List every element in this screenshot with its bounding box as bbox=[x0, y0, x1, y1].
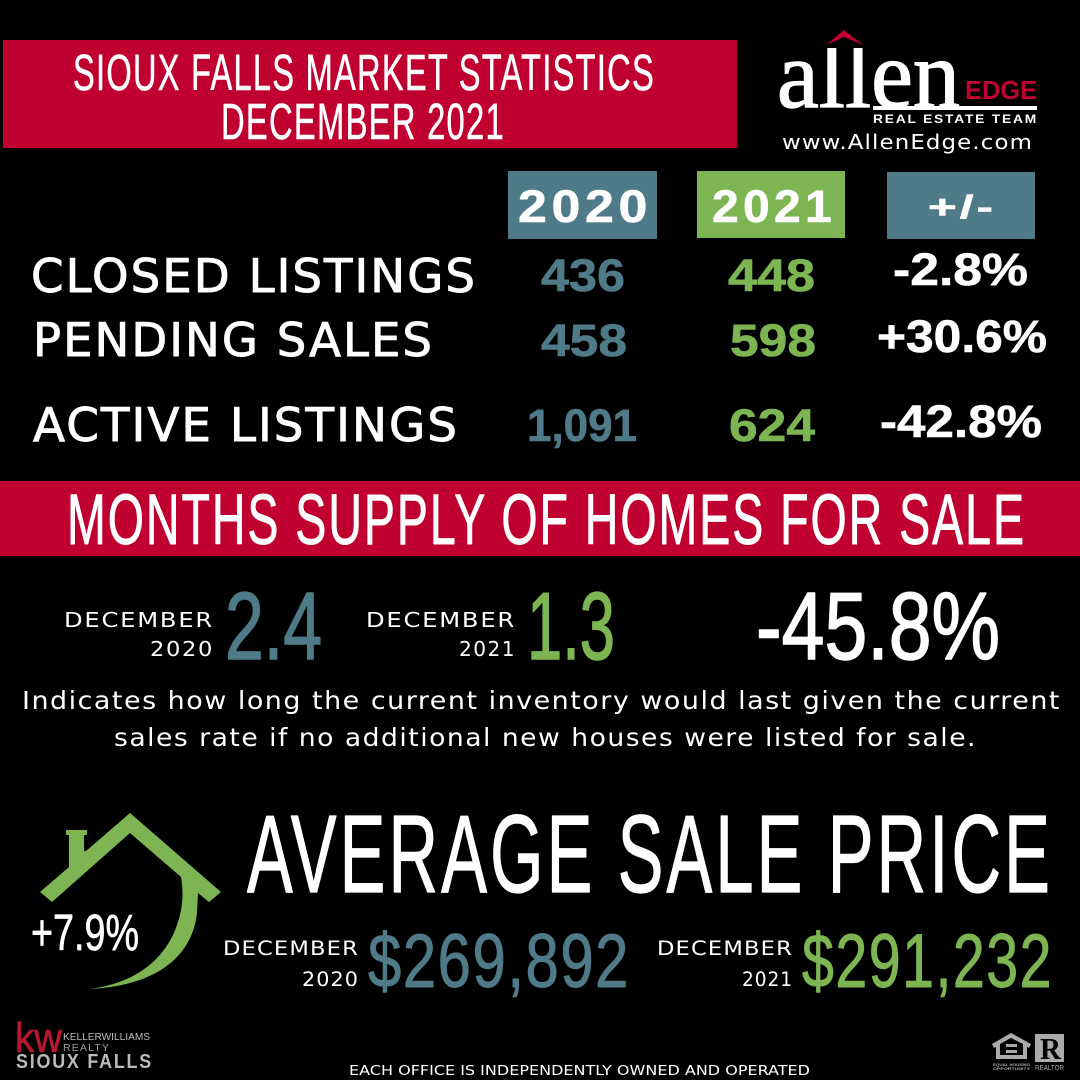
row: closed listings: 448 bbox=[728, 250, 815, 301]
row: closed listings: -2.8% bbox=[893, 244, 1028, 295]
table header: 2021: 2021 bbox=[712, 181, 836, 232]
icon: realtor bbox=[1035, 1031, 1064, 1072]
months supply December 2020: 2020 bbox=[150, 637, 214, 661]
months supply December 2021: 1.3 bbox=[527, 573, 615, 680]
logo: Keller Williams: REALTY bbox=[63, 1043, 110, 1054]
table header: change: +/- bbox=[928, 189, 996, 225]
average price December 2021: DECEMBER bbox=[657, 937, 793, 960]
icon: equal housing: EQUAL HOUSING bbox=[993, 1063, 1030, 1067]
months supply December 2021: 2021 bbox=[459, 637, 516, 661]
average price December 2020 bbox=[223, 919, 630, 1004]
logo: Keller Williams: kw bbox=[15, 1014, 63, 1061]
average price December 2020: $269,892 bbox=[368, 919, 630, 1004]
row: active listings bbox=[33, 396, 1042, 452]
average price December 2021 bbox=[657, 919, 1053, 1004]
row: active listings: -42.8% bbox=[880, 396, 1042, 447]
row: pending sales: PENDING SALES bbox=[33, 313, 434, 367]
title banner bbox=[3, 40, 737, 150]
average price December 2021: 2021 bbox=[742, 968, 793, 991]
months supply description: Indicates how long the current inventory would last given the current bbox=[22, 686, 1061, 715]
months supply description bbox=[22, 686, 1061, 752]
row: active listings: ACTIVE LISTINGS bbox=[33, 398, 459, 452]
table header: change bbox=[887, 172, 1035, 239]
row: closed listings bbox=[31, 244, 1028, 303]
logo: Keller Williams: SIOUX FALLS bbox=[16, 1051, 153, 1073]
logo: Keller Williams bbox=[15, 1014, 153, 1073]
row: pending sales: +30.6% bbox=[877, 311, 1047, 362]
logo: Allen Edge: EDGE bbox=[965, 75, 1037, 105]
average price December 2020: DECEMBER bbox=[223, 937, 359, 960]
title banner: SIOUX FALLS MARKET STATISTICS bbox=[73, 44, 655, 101]
logo: Allen Edge: www.AllenEdge.com bbox=[782, 130, 1033, 154]
row: pending sales: 598 bbox=[730, 315, 816, 366]
table header: 2021 bbox=[697, 171, 845, 238]
average price December 2020: 2020 bbox=[302, 968, 359, 991]
row: pending sales bbox=[33, 311, 1047, 367]
office disclaimer: EACH OFFICE IS INDEPENDENTLY OWNED AND OPERATED bbox=[349, 1064, 810, 1079]
logo: Allen Edge: REAL ESTATE TEAM bbox=[873, 114, 1038, 126]
icon: realtor: R bbox=[1040, 1031, 1062, 1066]
months supply December 2021 bbox=[366, 573, 615, 680]
title banner: DECEMBER 2021 bbox=[221, 93, 505, 150]
months supply description: sales rate if no additional new houses were listed for sale. bbox=[114, 723, 977, 752]
row: pending sales: 458 bbox=[541, 315, 627, 366]
icon: realtor: REALTOR bbox=[1035, 1065, 1064, 1072]
icon: equal housing bbox=[992, 1033, 1031, 1071]
months supply change: -45.8% bbox=[756, 573, 1000, 680]
months supply December 2020: 2.4 bbox=[225, 573, 322, 680]
icon: green house bbox=[40, 813, 221, 989]
row: closed listings: 436 bbox=[541, 250, 625, 301]
months supply December 2020 bbox=[64, 573, 322, 680]
table header: 2020: 2020 bbox=[518, 181, 652, 232]
house change value: +7.9% bbox=[31, 904, 139, 961]
row: active listings: 1,091 bbox=[527, 400, 637, 451]
logo: Allen Edge bbox=[777, 21, 1038, 154]
row: active listings: 624 bbox=[729, 400, 815, 451]
logo: Allen Edge: allen bbox=[777, 21, 960, 128]
logo: Keller Williams: KELLERWILLIAMS bbox=[63, 1032, 150, 1043]
row: closed listings: CLOSED LISTINGS bbox=[31, 249, 477, 303]
months supply December 2021: DECEMBER bbox=[366, 608, 516, 632]
icon: equal housing: OPPORTUNITY bbox=[993, 1067, 1031, 1071]
months supply December 2020: DECEMBER bbox=[64, 608, 214, 632]
table header: 2020 bbox=[508, 171, 657, 239]
